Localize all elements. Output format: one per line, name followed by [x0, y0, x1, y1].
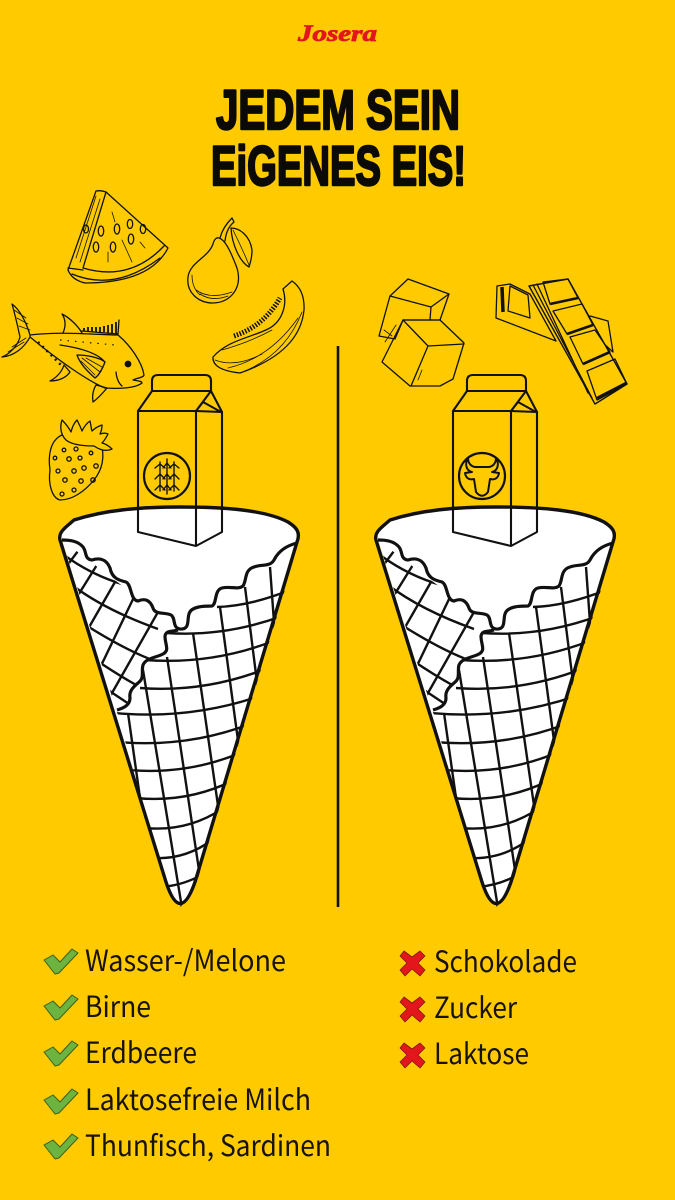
item: Zucker: Zucker — [434, 985, 518, 1027]
check icon 5 — [44, 1134, 78, 1159]
icon: cow head badge — [465, 458, 499, 496]
check icon 4 — [44, 1089, 78, 1114]
icon: pear — [188, 218, 252, 303]
title — [211, 78, 466, 197]
left ice cream cone — [60, 507, 299, 908]
cross icon 2 — [400, 997, 425, 1022]
icon: tuna fish — [2, 304, 144, 402]
title: EiGENES EIS! — [211, 134, 466, 197]
cross icon 3 — [400, 1043, 425, 1068]
item: Schokolade: Schokolade — [434, 939, 577, 981]
title: JEDEM SEIN — [216, 78, 460, 141]
item: Wasser-/Melone: Wasser-/Melone — [85, 938, 286, 980]
logo: Josera: Josera — [297, 21, 377, 46]
icon: melon slice — [213, 281, 304, 373]
center divider line — [337, 346, 339, 907]
cross icon 1 — [400, 951, 425, 976]
icon: strawberry — [49, 420, 112, 500]
item: Thunfisch, Sardinen: Thunfisch, Sardinen — [85, 1123, 331, 1165]
list: allowed foods — [44, 938, 331, 1165]
check icon 3 — [44, 1041, 78, 1066]
list: forbidden foods — [400, 939, 577, 1073]
left milk carton — [138, 375, 222, 546]
icon: chocolate bar — [496, 279, 627, 404]
item: Laktosefreie Milch: Laktosefreie Milch — [85, 1077, 311, 1119]
icon: plant badge — [155, 459, 179, 494]
right milk carton — [453, 375, 537, 546]
icon: watermelon slice — [68, 191, 168, 283]
icon: sugar cubes — [379, 279, 464, 386]
item: Birne: Birne — [85, 984, 151, 1026]
item: Laktose: Laktose — [434, 1031, 529, 1073]
check icon 2 — [44, 995, 78, 1020]
right ice cream cone — [376, 507, 615, 908]
item: Erdbeere: Erdbeere — [85, 1030, 197, 1072]
check icon 1 — [44, 949, 78, 974]
